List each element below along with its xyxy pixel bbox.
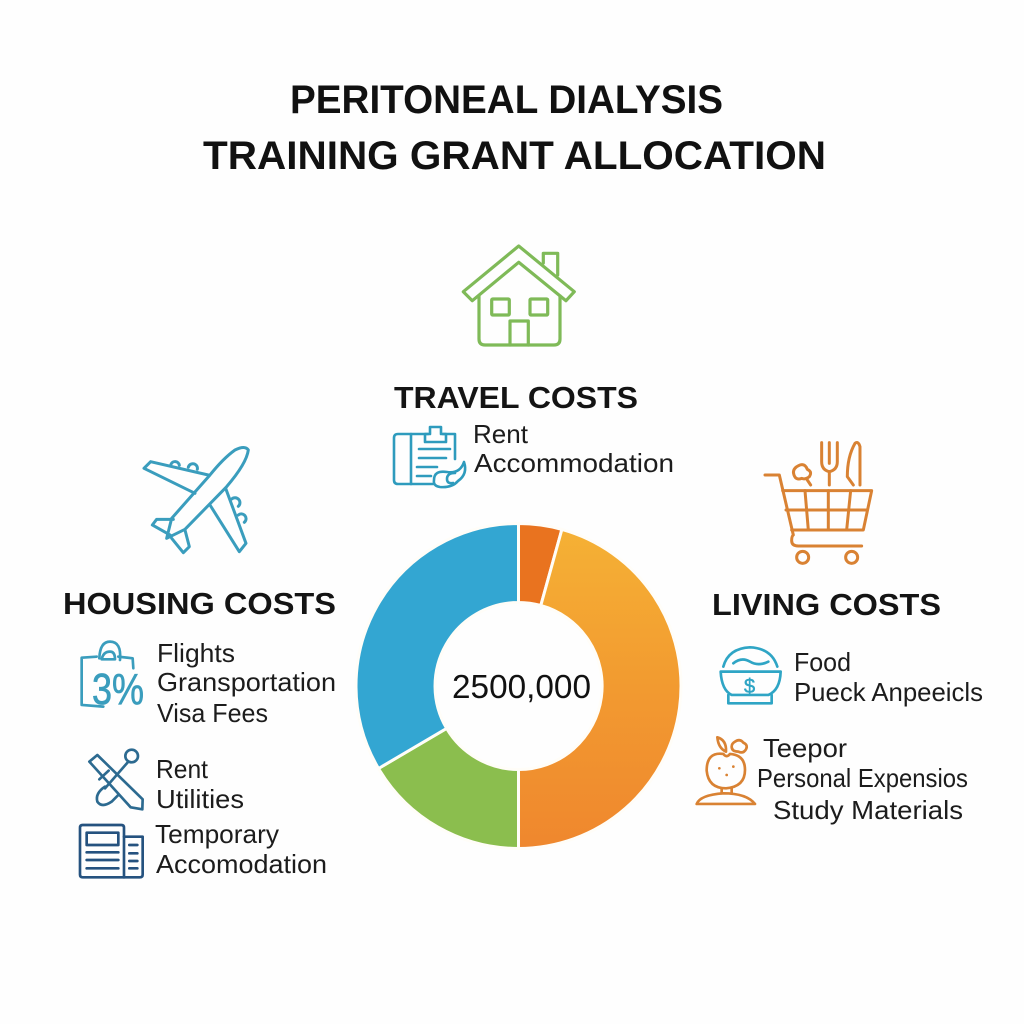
text: travel items: Accommodation [474, 448, 674, 478]
text: rent items: Rent [156, 754, 209, 784]
text: flights items: Flights [157, 638, 235, 668]
icon: clipboard document [394, 427, 465, 487]
text: temporary accommodation: Accomodation [156, 849, 327, 879]
text: temporary accommodation [155, 819, 327, 879]
heading: housing costs: HOUSING COSTS [63, 586, 336, 621]
icon: shopping cart with cutlery [765, 443, 872, 563]
text: rent items [156, 754, 244, 814]
text: flights items [157, 638, 336, 728]
text: food items: Pueck Anpeeicls [794, 677, 983, 707]
text: personal items: Study Materials [773, 795, 963, 825]
text: flights items: Visa Fees [157, 698, 268, 728]
panel: top category [394, 246, 674, 487]
heading: travel costs: TRAVEL COSTS [394, 380, 638, 415]
text: personal items [757, 733, 968, 825]
text: travel items [473, 419, 674, 478]
slice: green [378, 728, 518, 848]
icon: shopping bag with percent [82, 642, 144, 714]
panel: left category [63, 447, 336, 879]
icon: food bowl with dollar [721, 647, 781, 703]
text: flights items: Gransportation [157, 667, 336, 697]
icon: newspaper [80, 825, 143, 877]
heading: living costs: LIVING COSTS [712, 587, 941, 622]
title: TRAINING GRANT ALLOCATION [203, 134, 826, 178]
panel: right category [697, 443, 983, 825]
donut chart [356, 524, 681, 848]
icon: airplane [144, 447, 248, 553]
text: temporary accommodation: Temporary [155, 819, 279, 849]
text: food items: Food [794, 647, 851, 677]
slice: small red-orange [518, 524, 562, 606]
icon: house [463, 246, 574, 345]
slice: orange [518, 529, 681, 848]
icon: food bowl with dollar: $ [744, 676, 755, 698]
slice: blue [356, 524, 518, 768]
icon: pencil and wrench [89, 750, 143, 809]
text: rent items: Utilities [156, 784, 244, 814]
text: personal items: Personal Expensios [757, 763, 968, 793]
text: travel items: Rent [473, 419, 529, 449]
text: food items [794, 647, 983, 707]
title: PERITONEAL DIALYSIS [290, 78, 723, 122]
center total: 2500,000 [452, 668, 591, 705]
title [203, 78, 826, 178]
icon: shopping bag with percent: 3% [92, 665, 144, 714]
text: personal items: Teepor [763, 733, 847, 763]
icon: apple [697, 737, 755, 804]
